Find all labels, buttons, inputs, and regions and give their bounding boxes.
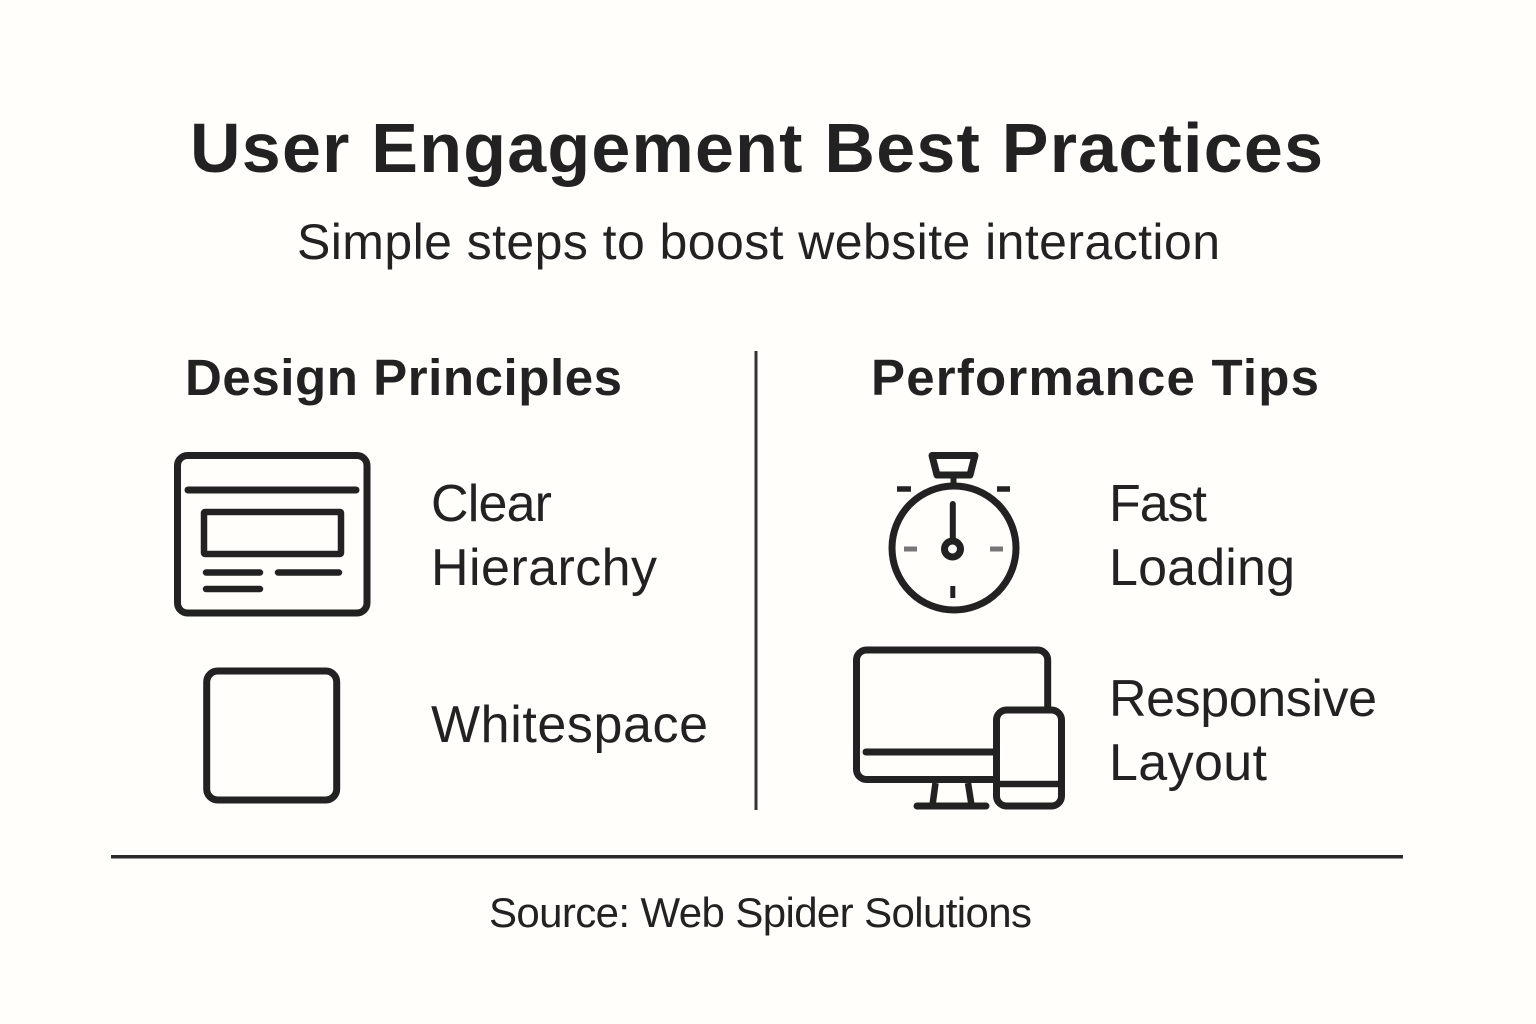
title: User Engagement Best Practices: [190, 109, 1323, 187]
horizontal divider: [111, 855, 1403, 858]
icon: empty square: [207, 671, 337, 800]
icon: responsive devices: [856, 650, 1062, 806]
source note: Source: Web Spider Solutions: [489, 889, 1032, 936]
heading: performance tips: Performance Tips: [871, 349, 1319, 406]
label: responsive layout: Layout: [1109, 734, 1268, 792]
label: fast loading: [1109, 475, 1295, 597]
icon: web page layout: [178, 456, 367, 613]
subtitle: Simple steps to boost website interaction: [297, 214, 1220, 270]
vertical divider: [754, 351, 758, 810]
label: clear hierarchy: [431, 475, 657, 597]
label: fast loading: Loading: [1109, 539, 1295, 597]
label: fast loading: Fast: [1109, 475, 1208, 533]
icon: stopwatch: [892, 456, 1016, 610]
panel: performance tips: [856, 349, 1377, 806]
heading: design principles: Design Principles: [185, 349, 622, 406]
label: clear hierarchy: Clear: [431, 475, 552, 533]
label: responsive layout: [1109, 670, 1377, 792]
label: responsive layout: Responsive: [1109, 670, 1377, 728]
label: whitespace: Whitespace: [431, 696, 708, 754]
label: clear hierarchy: Hierarchy: [431, 539, 657, 597]
panel: design principles: [178, 349, 708, 800]
